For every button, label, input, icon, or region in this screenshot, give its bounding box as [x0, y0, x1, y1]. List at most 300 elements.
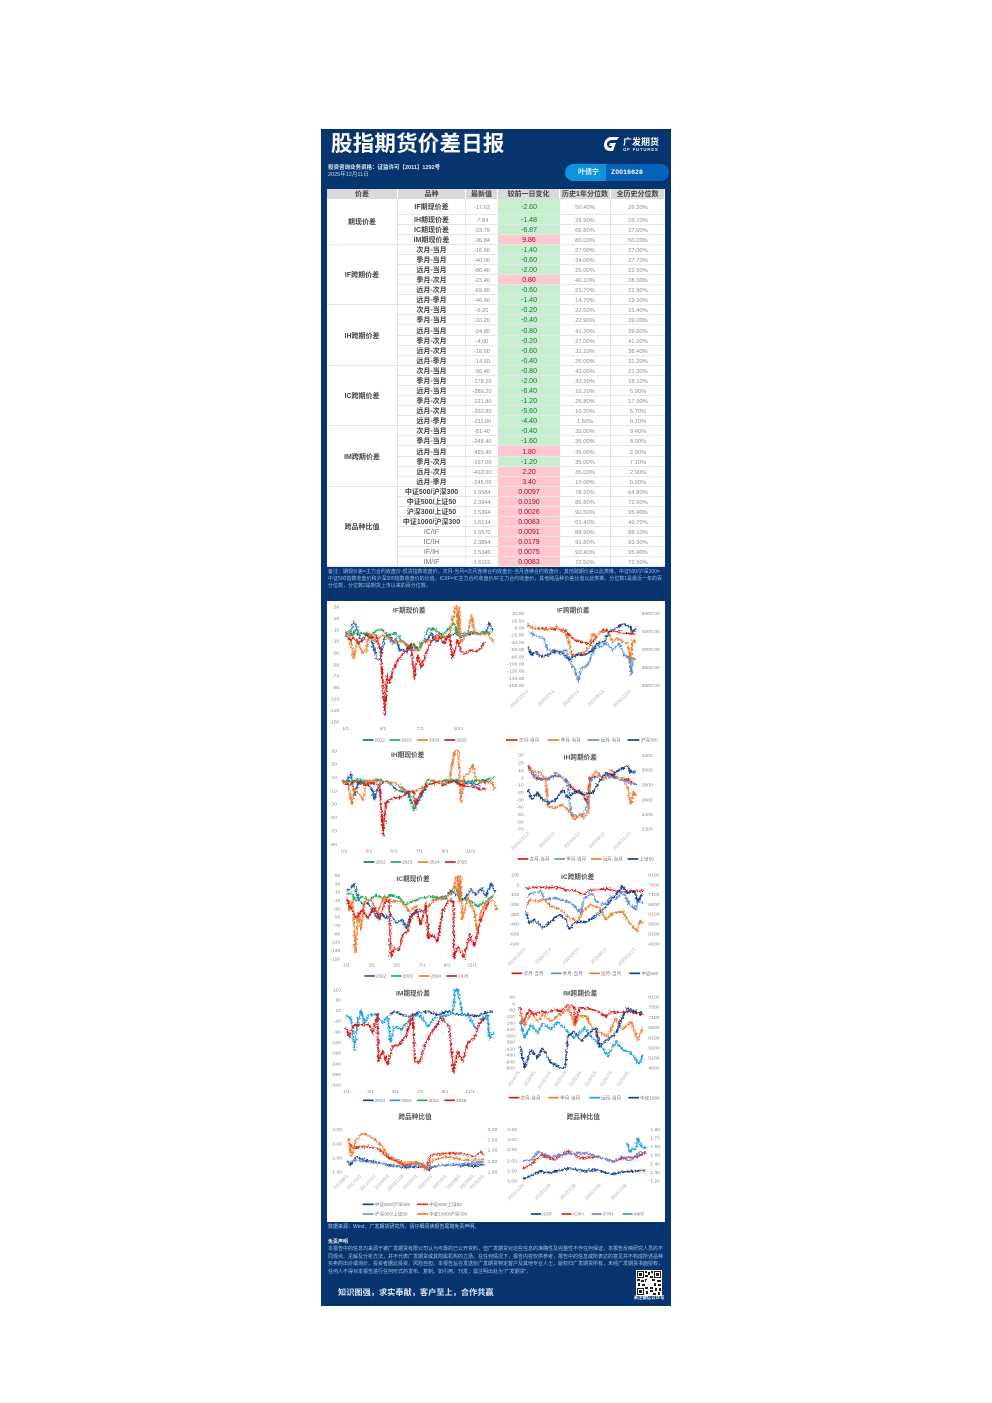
- table group: 期现价差: 80.00%: [575, 238, 595, 244]
- chart title: IM期现价差: [396, 988, 430, 997]
- legend: [518, 856, 654, 863]
- table group: 跨品种比值: 跨品种比值: [344, 524, 380, 531]
- left axis labels: -480: [505, 1053, 515, 1059]
- x axis labels: 3/1: [368, 962, 375, 968]
- right axis labels: 1.00: [488, 1169, 498, 1175]
- date labels: 2025/2/13: [537, 831, 556, 849]
- table group: 期现价差: 9.86: [522, 237, 536, 244]
- right axis labels: 1.50: [488, 1159, 498, 1165]
- table group: IC跨期价差: -2.00: [521, 378, 537, 385]
- table group: 跨品种比值: 61.40%: [575, 520, 595, 526]
- table group: 跨品种比值: 1.5570: [473, 530, 491, 536]
- table group: 跨品种比值: 0.0083: [518, 519, 540, 526]
- table group: 期现价差: -6.87: [521, 227, 537, 234]
- left axis labels: -200: [509, 902, 520, 908]
- legend: 2025: [456, 1098, 467, 1103]
- date labels: 2025/5/13: [562, 947, 580, 965]
- table group: 跨品种比值: 72.60%: [628, 500, 648, 506]
- legend: 2023: [402, 860, 413, 865]
- legend: 2022: [375, 738, 385, 743]
- y axis labels: -130: [330, 948, 341, 954]
- table group: 跨品种比值: 1.5584: [473, 490, 491, 496]
- date labels: 2018/5/3: [374, 1174, 390, 1190]
- table group: 跨品种比值: 90.50%: [575, 510, 595, 516]
- date labels: 2024/1/28: [583, 1183, 602, 1201]
- table group: IF跨期价差: -16.60: [474, 248, 490, 254]
- right axis labels: 2800: [642, 782, 653, 788]
- date labels: 2025/5/13: [562, 689, 580, 707]
- table group: IF跨期价差: 远月-当月: [416, 267, 447, 274]
- left axis labels: -20: [516, 790, 524, 796]
- date labels: 2025/9/5: [616, 1070, 630, 1088]
- right axis labels: 7100: [648, 892, 660, 898]
- y axis labels: -110: [331, 940, 341, 946]
- x axis labels: 11/1: [468, 962, 477, 968]
- y axis labels: -150: [329, 720, 340, 726]
- left axis labels: 0: [521, 775, 524, 781]
- table group: IM跨期价差: [327, 426, 665, 487]
- table group: IM跨期价差: 远月-次月: [416, 469, 447, 476]
- y axis labels: 50: [335, 873, 341, 879]
- table group: IH跨期价差: 27.00%: [575, 339, 595, 345]
- left axis labels: 2.50: [507, 1147, 517, 1153]
- x axis labels: 1/1: [340, 848, 347, 854]
- table group: 期现价差: -1.48: [521, 217, 537, 224]
- data lines: [520, 1005, 643, 1068]
- table group: IC跨期价差: 25.80%: [575, 399, 595, 405]
- legend: 中证500: [641, 970, 658, 977]
- date labels: [507, 1183, 628, 1201]
- left axis labels: -80.00: [510, 654, 525, 660]
- legend: 2022: [429, 1098, 439, 1103]
- table group: IC跨期价差: -4.40: [521, 418, 537, 425]
- y axis labels: 10: [334, 628, 340, 634]
- table group: IC跨期价差: 17.90%: [628, 399, 648, 405]
- legend: 次月-当月: [519, 737, 539, 744]
- date labels: 2025/5/5: [583, 1070, 598, 1088]
- date labels: [507, 947, 637, 967]
- right axis labels: 6600: [648, 1025, 660, 1031]
- table group: 跨品种比值: 95.40%: [628, 550, 648, 556]
- table group: IM跨期价差: -81.40: [474, 429, 490, 435]
- table group: 期现价差: 26.30%: [628, 205, 648, 211]
- table group: IC跨期价差: 远月-次月: [416, 408, 447, 415]
- left axis labels: 2.00: [332, 1155, 342, 1161]
- chart title: IC跨期价差: [561, 872, 595, 881]
- table group: 期现价差: IH期现价差: [414, 217, 449, 224]
- date labels: 2025/1/28: [609, 1183, 628, 1201]
- right axis labels: 7600: [648, 1005, 660, 1011]
- left axis labels: -140.00: [507, 676, 525, 682]
- table group: IH跨期价差: 38.40%: [628, 349, 648, 355]
- right axis labels: 4500.00: [642, 629, 660, 635]
- chart: IH跨期价差: [510, 753, 654, 863]
- x axis labels: 7/1: [417, 726, 424, 732]
- table group: IH跨期价差: IH跨期价差: [344, 332, 380, 340]
- table group: IM跨期价差: 9.40%: [630, 429, 646, 435]
- right axis labels: 1.70: [650, 1135, 660, 1141]
- logo: GF Futures: 广发期货: [623, 137, 659, 147]
- left axis labels: 40.00: [512, 611, 525, 617]
- legend: 2023: [403, 974, 413, 979]
- y axis labels: -50: [332, 662, 340, 668]
- legend: 季月-当月: [561, 737, 581, 744]
- legend: IC/IF: [542, 1212, 553, 1217]
- table group: IF跨期价差: -1.40: [521, 297, 537, 304]
- table group: IH跨期价差: 31.40%: [628, 308, 648, 314]
- table group: IC跨期价差: 季月-当月: [416, 378, 447, 385]
- legend: [364, 860, 467, 865]
- table group: IF跨期价差: 远月-季月: [416, 297, 447, 304]
- table group: 跨品种比值: 72.50%: [628, 560, 648, 566]
- right axis labels: [488, 1127, 498, 1175]
- table group: IC跨期价差: 43.00%: [575, 369, 595, 375]
- table group: 跨品种比值: 78.20%: [575, 490, 595, 496]
- table group: IM跨期价差: 远月-季月: [416, 479, 447, 486]
- table group: 跨品种比值: IC/IH: [424, 539, 439, 546]
- y axis labels: -190: [331, 1051, 341, 1057]
- table group: IF跨期价差: -0.60: [521, 257, 537, 264]
- table group: IF跨期价差: -46.40: [474, 298, 490, 304]
- right axis labels: 4600: [648, 1066, 660, 1072]
- table group: IH跨期价差: 41.30%: [575, 328, 595, 334]
- right axis labels: 1.30: [650, 1170, 660, 1176]
- table group: IH跨期价差: -4.00: [476, 339, 488, 345]
- right axis labels: 3000.00: [642, 683, 660, 689]
- right axis labels: 5600: [648, 1045, 660, 1051]
- left axis labels: 2.00: [507, 1159, 517, 1165]
- date labels: 2023/1/28: [558, 1183, 577, 1201]
- chart title: IC期现价差: [396, 874, 430, 883]
- left axis labels: -240: [505, 1027, 515, 1033]
- right axis labels: 3.00: [488, 1127, 498, 1133]
- table group: 期现价差: 66.80%: [575, 228, 595, 234]
- table group: 跨品种比值: 93.40%: [575, 550, 595, 556]
- chart title: IM跨期价差: [563, 988, 598, 997]
- table group: IF跨期价差: 远月-次月: [416, 287, 447, 294]
- right axis labels: [648, 872, 660, 948]
- table group: 期现价差: 37.00%: [628, 228, 648, 234]
- table group: IC跨期价差: -1.20: [521, 398, 537, 405]
- table group: 跨品种比值: IM/IF: [424, 559, 439, 566]
- date labels: [510, 831, 632, 851]
- x axis labels: [342, 726, 464, 732]
- table group: IF跨期价差: [327, 245, 665, 305]
- y axis labels: 10: [331, 775, 337, 781]
- table group: IH跨期价差: 39.00%: [628, 318, 648, 324]
- date labels: 2019/7/3: [402, 1174, 419, 1190]
- legend: 沪深300/上证50: [375, 1211, 408, 1218]
- y axis labels: 10: [335, 890, 341, 896]
- data lines: [528, 765, 636, 820]
- legend: 远月-当月: [603, 856, 623, 863]
- right axis labels: 2.50: [488, 1137, 498, 1143]
- report date: 2025年12月11日: [328, 172, 369, 178]
- y axis labels: -290: [331, 1072, 341, 1078]
- table group: IH跨期价差: -0.20: [521, 338, 537, 345]
- y axis labels: -90: [330, 842, 337, 848]
- data table: [327, 189, 665, 567]
- y axis labels: 30: [331, 761, 337, 767]
- table group: IC跨期价差: 1.60%: [577, 419, 593, 425]
- table group: IF跨期价差: 28.30%: [628, 278, 648, 284]
- y axis labels: 50: [334, 604, 340, 610]
- table group: 跨品种比值: 88.90%: [575, 530, 595, 536]
- table group: IF跨期价差: 21.70%: [575, 288, 595, 294]
- left axis labels: -500: [509, 932, 520, 938]
- table group: IC跨期价差: -6.40: [521, 388, 537, 395]
- data lines: [348, 1133, 484, 1170]
- chart: IF期现价差: [329, 604, 494, 743]
- legend: 中证1000: [640, 1094, 660, 1101]
- table group: 跨品种比值: 沪深300/上证50: [407, 509, 456, 516]
- right axis labels: 3200: [642, 753, 653, 759]
- y axis labels: [330, 873, 341, 962]
- table group: IM跨期价差: 7.10%: [630, 460, 646, 466]
- legend: 2024: [429, 860, 440, 865]
- right axis labels: [642, 611, 660, 689]
- legend: IC/IH: [573, 1212, 584, 1217]
- date labels: 2018/12/3: [386, 1174, 405, 1192]
- table group: IM跨期价差: -248.40: [472, 439, 491, 445]
- chart title: IF跨期价差: [557, 605, 590, 614]
- table group: IM跨期价差: 2.90%: [630, 470, 646, 476]
- table group: 期现价差: 29.90%: [575, 218, 595, 224]
- table group: IM跨期价差: 3.40: [522, 479, 536, 486]
- table group: 期现价差: IC期现价差: [414, 227, 449, 234]
- right axis labels: 2.00: [488, 1148, 498, 1154]
- legend: 2022: [376, 974, 387, 979]
- right axis labels: 8100: [648, 995, 660, 1001]
- legend: 2022: [375, 860, 386, 865]
- y axis labels: -70: [332, 674, 340, 680]
- table group: IM跨期价差: 10.00%: [575, 480, 595, 486]
- x axis labels: 5/1: [392, 1089, 399, 1095]
- table header: 最新值: [471, 190, 492, 198]
- y axis labels: 30: [334, 616, 340, 622]
- table group: IH跨期价差: 25.00%: [575, 359, 595, 365]
- date labels: 2025/11/13: [612, 689, 632, 709]
- legend: 2024: [429, 738, 440, 743]
- date labels: 2025/7/5: [599, 1070, 614, 1088]
- table group: IH跨期价差: 次月-当月: [416, 307, 447, 314]
- table group: IH跨期价差: -0.40: [521, 317, 537, 324]
- table group: IF跨期价差: IF跨期价差: [345, 272, 379, 279]
- left axis labels: 30: [518, 753, 524, 759]
- right axis labels: 5100: [648, 1056, 660, 1062]
- legend: [363, 738, 467, 743]
- date labels: 2024/12/13: [507, 947, 527, 967]
- data source: 数据来源：Wind、广发期货研究所。请仔细阅读报告尾端免责声明。: [328, 1224, 479, 1230]
- table group: IH跨期价差: -0.40: [521, 358, 537, 365]
- legend: 次月-当月: [523, 970, 544, 977]
- date labels: 2025/1/5: [553, 1070, 568, 1088]
- table group: IH跨期价差: 远月-当月: [416, 328, 447, 334]
- x axis labels: 11/1: [465, 1089, 475, 1095]
- table header: 价差: [355, 190, 369, 198]
- table group: 跨品种比值: 2.3894: [473, 540, 491, 546]
- left axis labels: -120: [505, 1014, 515, 1020]
- table header: 历史1年分位数: [562, 190, 608, 198]
- date labels: 2025/11/13: [617, 947, 637, 967]
- y axis labels: -150: [330, 956, 341, 962]
- table group: 跨品种比值: 1.5364: [473, 510, 491, 516]
- table group: 跨品种比值: 72.50%: [575, 560, 595, 566]
- x axis labels: 7/1: [416, 848, 423, 854]
- data lines: [347, 876, 497, 958]
- left axis labels: -50: [516, 812, 524, 818]
- table group: 跨品种比值: 2.3944: [473, 500, 491, 506]
- x axis labels: 3/1: [367, 1089, 374, 1095]
- right axis labels: 3500.00: [642, 665, 660, 671]
- table group: 跨品种比值: 0.0179: [518, 539, 540, 546]
- table group: IH跨期价差: -14.60: [474, 359, 490, 365]
- legend: 远月-当月: [601, 1094, 621, 1101]
- date labels: [509, 689, 632, 709]
- right axis labels: 2600: [642, 797, 653, 803]
- left axis labels: -100: [509, 892, 520, 898]
- left axis labels: 3.00: [507, 1137, 517, 1143]
- table group: IC跨期价差: -121.80: [472, 399, 491, 405]
- table group: IF跨期价差: 次月-当月: [416, 247, 447, 254]
- left axis labels: 0: [512, 1001, 515, 1007]
- y axis labels: -30: [330, 802, 337, 808]
- legend: 2025: [457, 860, 467, 865]
- left axis labels: 1.00: [332, 1169, 342, 1175]
- left axis labels: 3.00: [332, 1141, 342, 1147]
- left axis labels: -40: [516, 805, 524, 811]
- table group: 跨品种比值: 1.6134: [473, 520, 491, 526]
- table group: IF跨期价差: -2.00: [521, 267, 537, 274]
- date labels: 2020/2/3: [417, 1174, 434, 1190]
- table group: IH跨期价差: 41.00%: [628, 339, 648, 345]
- table group: IC跨期价差: 远月-季月: [416, 418, 447, 425]
- left axis labels: -540: [505, 1059, 515, 1065]
- x axis labels: 1/1: [343, 962, 350, 968]
- table group: 跨品种比值: 0.0091: [518, 529, 540, 536]
- table group: IC跨期价差: 次月-当月: [416, 368, 447, 375]
- date labels: 2017/10/3: [359, 1174, 377, 1192]
- table group: IH跨期价差: 远月-季月: [416, 358, 447, 365]
- table group: IM跨期价差: 2.90%: [630, 450, 646, 456]
- x axis labels: 9/1: [442, 848, 449, 854]
- table group: IC跨期价差: 0.70%: [630, 419, 646, 425]
- legend: 中证1000/沪深300: [429, 1211, 467, 1218]
- right axis labels: 3000: [642, 768, 653, 774]
- x axis labels: 1/1: [343, 1089, 350, 1095]
- left axis labels: [507, 611, 525, 689]
- data lines: [526, 886, 643, 931]
- table group: 跨品种比值: IC/IF: [424, 529, 439, 536]
- table group: IC跨期价差: 远月-当月: [416, 388, 447, 395]
- date labels: 2022/1/28: [533, 1183, 552, 1201]
- x axis labels: 5/1: [391, 848, 398, 854]
- table group: IC跨期价差: 10.20%: [575, 409, 595, 415]
- table group: 跨品种比值: 中证1000/沪深300: [403, 519, 460, 526]
- legend: 中证500/沪深300: [375, 1201, 411, 1208]
- left axis labels: 10: [518, 768, 524, 774]
- legend: 中证500/上证50: [429, 1201, 462, 1208]
- right axis labels: [642, 753, 653, 833]
- chart title: 跨品种比值: [567, 1112, 600, 1121]
- date labels: [507, 1070, 630, 1090]
- table group: 跨品种比值: 中证500/沪深300: [405, 489, 458, 496]
- table group: IC跨期价差: 6.90%: [630, 389, 646, 395]
- x axis labels: 7/1: [417, 1089, 424, 1095]
- table group: IH跨期价差: -0.60: [521, 348, 537, 355]
- table group: 跨品种比值: 91.80%: [575, 540, 595, 546]
- table group: IH跨期价差: -0.80: [521, 328, 537, 334]
- left axis labels: -300: [505, 1033, 515, 1039]
- left axis labels: 100: [511, 872, 520, 878]
- table group: 跨品种比值: 86.80%: [575, 500, 595, 506]
- table group: IM跨期价差: 2.20: [522, 469, 536, 476]
- table group: IM跨期价差: -1.60: [521, 438, 537, 445]
- legend: IF/IH: [603, 1212, 613, 1217]
- table group: 跨品种比值: 49.70%: [628, 520, 648, 526]
- table group: IC跨期价差: 32.30%: [575, 379, 595, 385]
- data lines: [346, 990, 494, 1072]
- date labels: 2024/12/13: [509, 689, 529, 709]
- table group: IM跨期价差: IM跨期价差: [344, 454, 380, 460]
- legend: 2024: [431, 974, 441, 979]
- y axis labels: -90: [334, 1029, 341, 1035]
- table group: IF跨期价差: 季月-当月: [416, 257, 447, 264]
- table group: IH跨期价差: 31.20%: [628, 359, 648, 365]
- y axis labels: -30: [332, 651, 340, 657]
- y axis labels: -130: [329, 708, 340, 714]
- data lines: [346, 607, 494, 715]
- icon: QR code: [636, 1270, 662, 1296]
- x axis labels: 10/1: [454, 726, 464, 732]
- table group: IF跨期价差: 40.10%: [575, 278, 595, 284]
- left axis labels: -70: [516, 827, 524, 833]
- legend: 次月-当月: [520, 1094, 541, 1101]
- legend: 远月-当月: [601, 970, 621, 977]
- chart title: IH期现价差: [391, 750, 425, 759]
- table group: IC跨期价差: -332.80: [472, 409, 491, 415]
- y axis labels: -50: [330, 815, 337, 821]
- table group: 跨品种比值: 1.6115: [474, 560, 490, 566]
- right axis labels: 4600: [648, 942, 660, 948]
- table group: IH跨期价差: 季月-当月: [416, 317, 447, 324]
- table group: IF跨期价差: -23.40: [474, 278, 490, 284]
- table header: 品种: [424, 190, 438, 198]
- x axis labels: 1/1: [342, 726, 349, 732]
- left axis labels: -100.00: [507, 662, 525, 668]
- panel: report background: [321, 129, 671, 1306]
- left axis labels: 0: [517, 882, 520, 888]
- right axis labels: 6100: [648, 1035, 660, 1041]
- table group: 期现价差: -2.60: [521, 204, 537, 211]
- y axis labels: -70: [330, 828, 337, 834]
- table group: 跨品种比值: 88.10%: [628, 530, 648, 536]
- table group: 期现价差: 26.70%: [628, 218, 648, 224]
- table group: IC跨期价差: -0.80: [521, 368, 537, 375]
- table group: 期现价差: [327, 199, 665, 245]
- right axis labels: 5000.00: [642, 611, 660, 617]
- table group: IC跨期价差: -56.40: [474, 369, 490, 375]
- x axis labels: [343, 962, 477, 968]
- data lines: [523, 1138, 646, 1179]
- table group: 期现价差: 50.20%: [628, 238, 648, 244]
- left axis labels: 1.00: [507, 1179, 517, 1185]
- table group: IM跨期价差: 0.20%: [630, 480, 646, 486]
- table group: 跨品种比值: 中证500/上证50: [407, 499, 456, 506]
- y axis labels: 60: [335, 997, 341, 1003]
- table group: IH跨期价差: 31.10%: [575, 349, 595, 355]
- right axis labels: 6600: [648, 902, 660, 908]
